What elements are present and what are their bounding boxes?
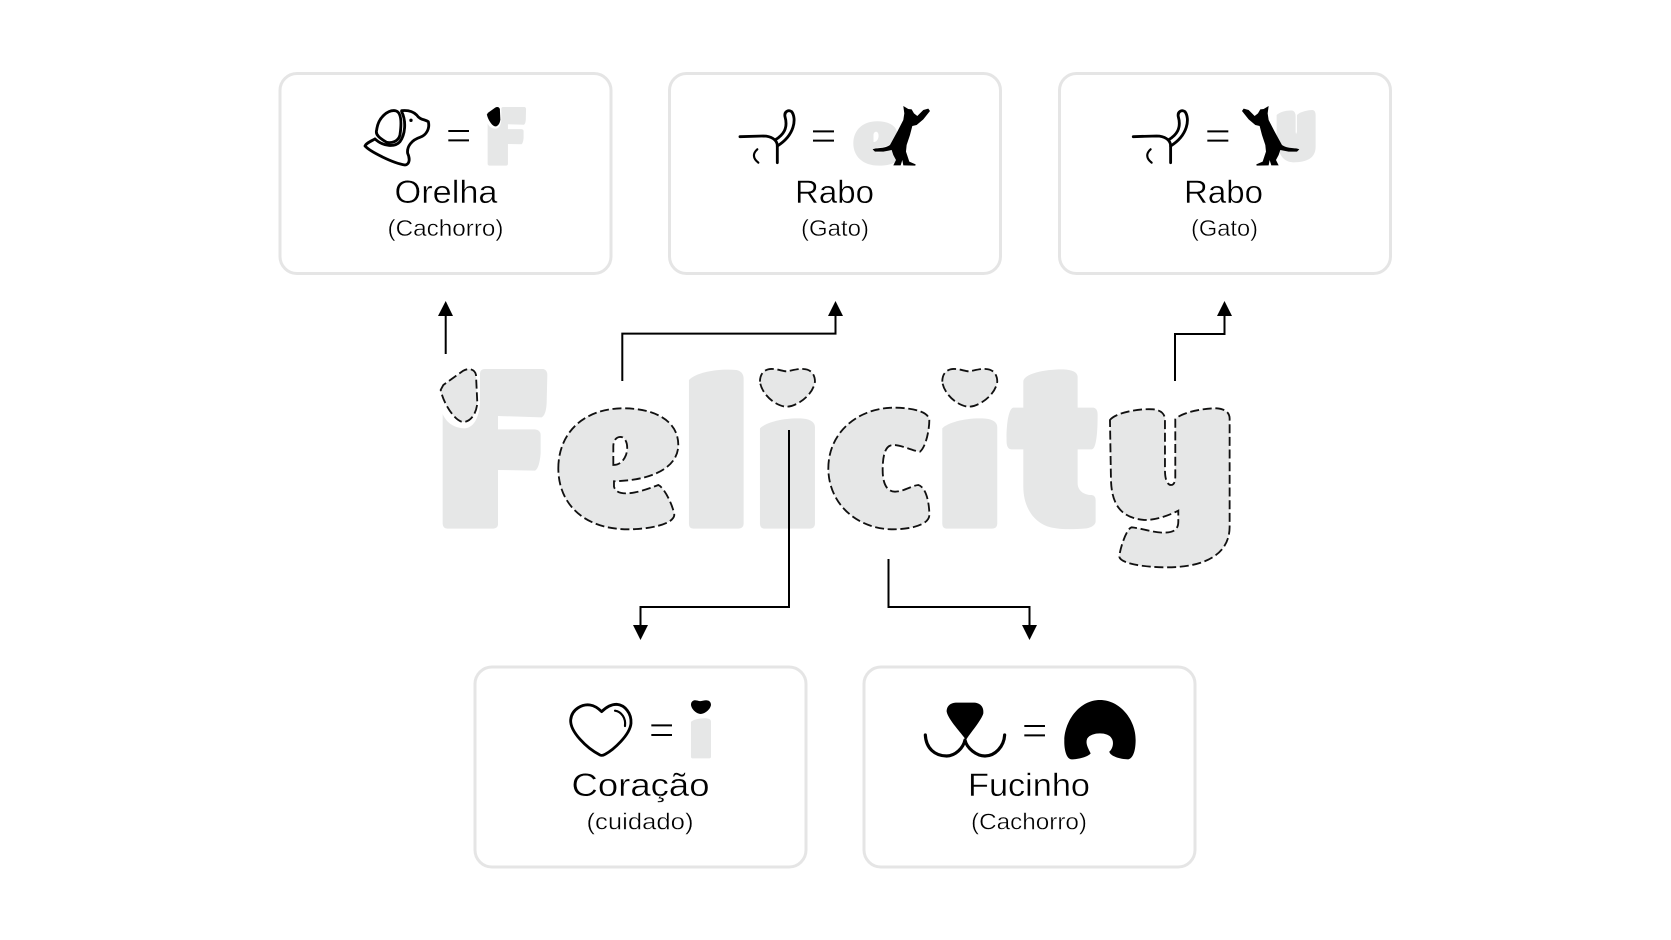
panel: Coração (cuidado) [475,667,806,867]
text: (Gato): (Gato) [1191,215,1258,241]
icon: equals sign [1207,131,1228,141]
text: (Cachorro): (Cachorro) [971,808,1087,834]
icon: cat tail [1133,111,1187,163]
letter i with dashed heart [760,369,815,529]
icon: letter e with black cat [853,106,930,166]
panel: Rabo (Gato) for e [670,74,1000,274]
text: (Cachorro): (Cachorro) [388,215,504,241]
icon: letter y with black cat [1242,106,1316,166]
icon: equals sign [651,725,672,735]
heading: Orelha: Orelha [394,174,498,210]
arrow: i to Coração [633,430,789,640]
text: (cuidado): (cuidado) [586,808,694,834]
wordmark: Felicity [441,369,1230,567]
icon: dog with ear [365,111,429,165]
arrow: y to Rabo [1175,301,1232,381]
letter y dashed [1110,408,1230,567]
arrow: e to Rabo [622,301,843,381]
icon: letter F with black ear [487,107,526,166]
icon: cat tail [740,111,794,163]
text: (Gato): (Gato) [801,215,869,241]
letter c dashed [828,408,929,529]
letter t [1007,369,1098,529]
icon: heart outline [571,704,631,755]
icon: equals sign [448,131,469,140]
arrow: F to Orelha [438,301,453,354]
heading: Rabo: Rabo [1184,174,1263,210]
letter F with dashed ear [441,369,547,529]
arrow: c to Fucinho [888,559,1037,640]
letter i with dashed heart [942,369,997,529]
icon: equals sign [1024,726,1045,735]
heading: Rabo: Rabo [795,174,874,210]
panel: Orelha (Cachorro) [280,74,611,274]
panel: Fucinho (Cachorro) [864,667,1195,867]
icon: black snout shape [1064,700,1136,759]
heading: Coração: Coração [572,767,710,803]
heading: Fucinho: Fucinho [968,767,1090,803]
letter l [689,370,744,529]
icon: letter i with black heart [691,700,711,758]
icon: dog snout [925,703,1005,756]
icon: equals sign [813,131,834,141]
panel: Rabo (Gato) for y [1060,74,1390,274]
letter e dashed [558,408,678,529]
